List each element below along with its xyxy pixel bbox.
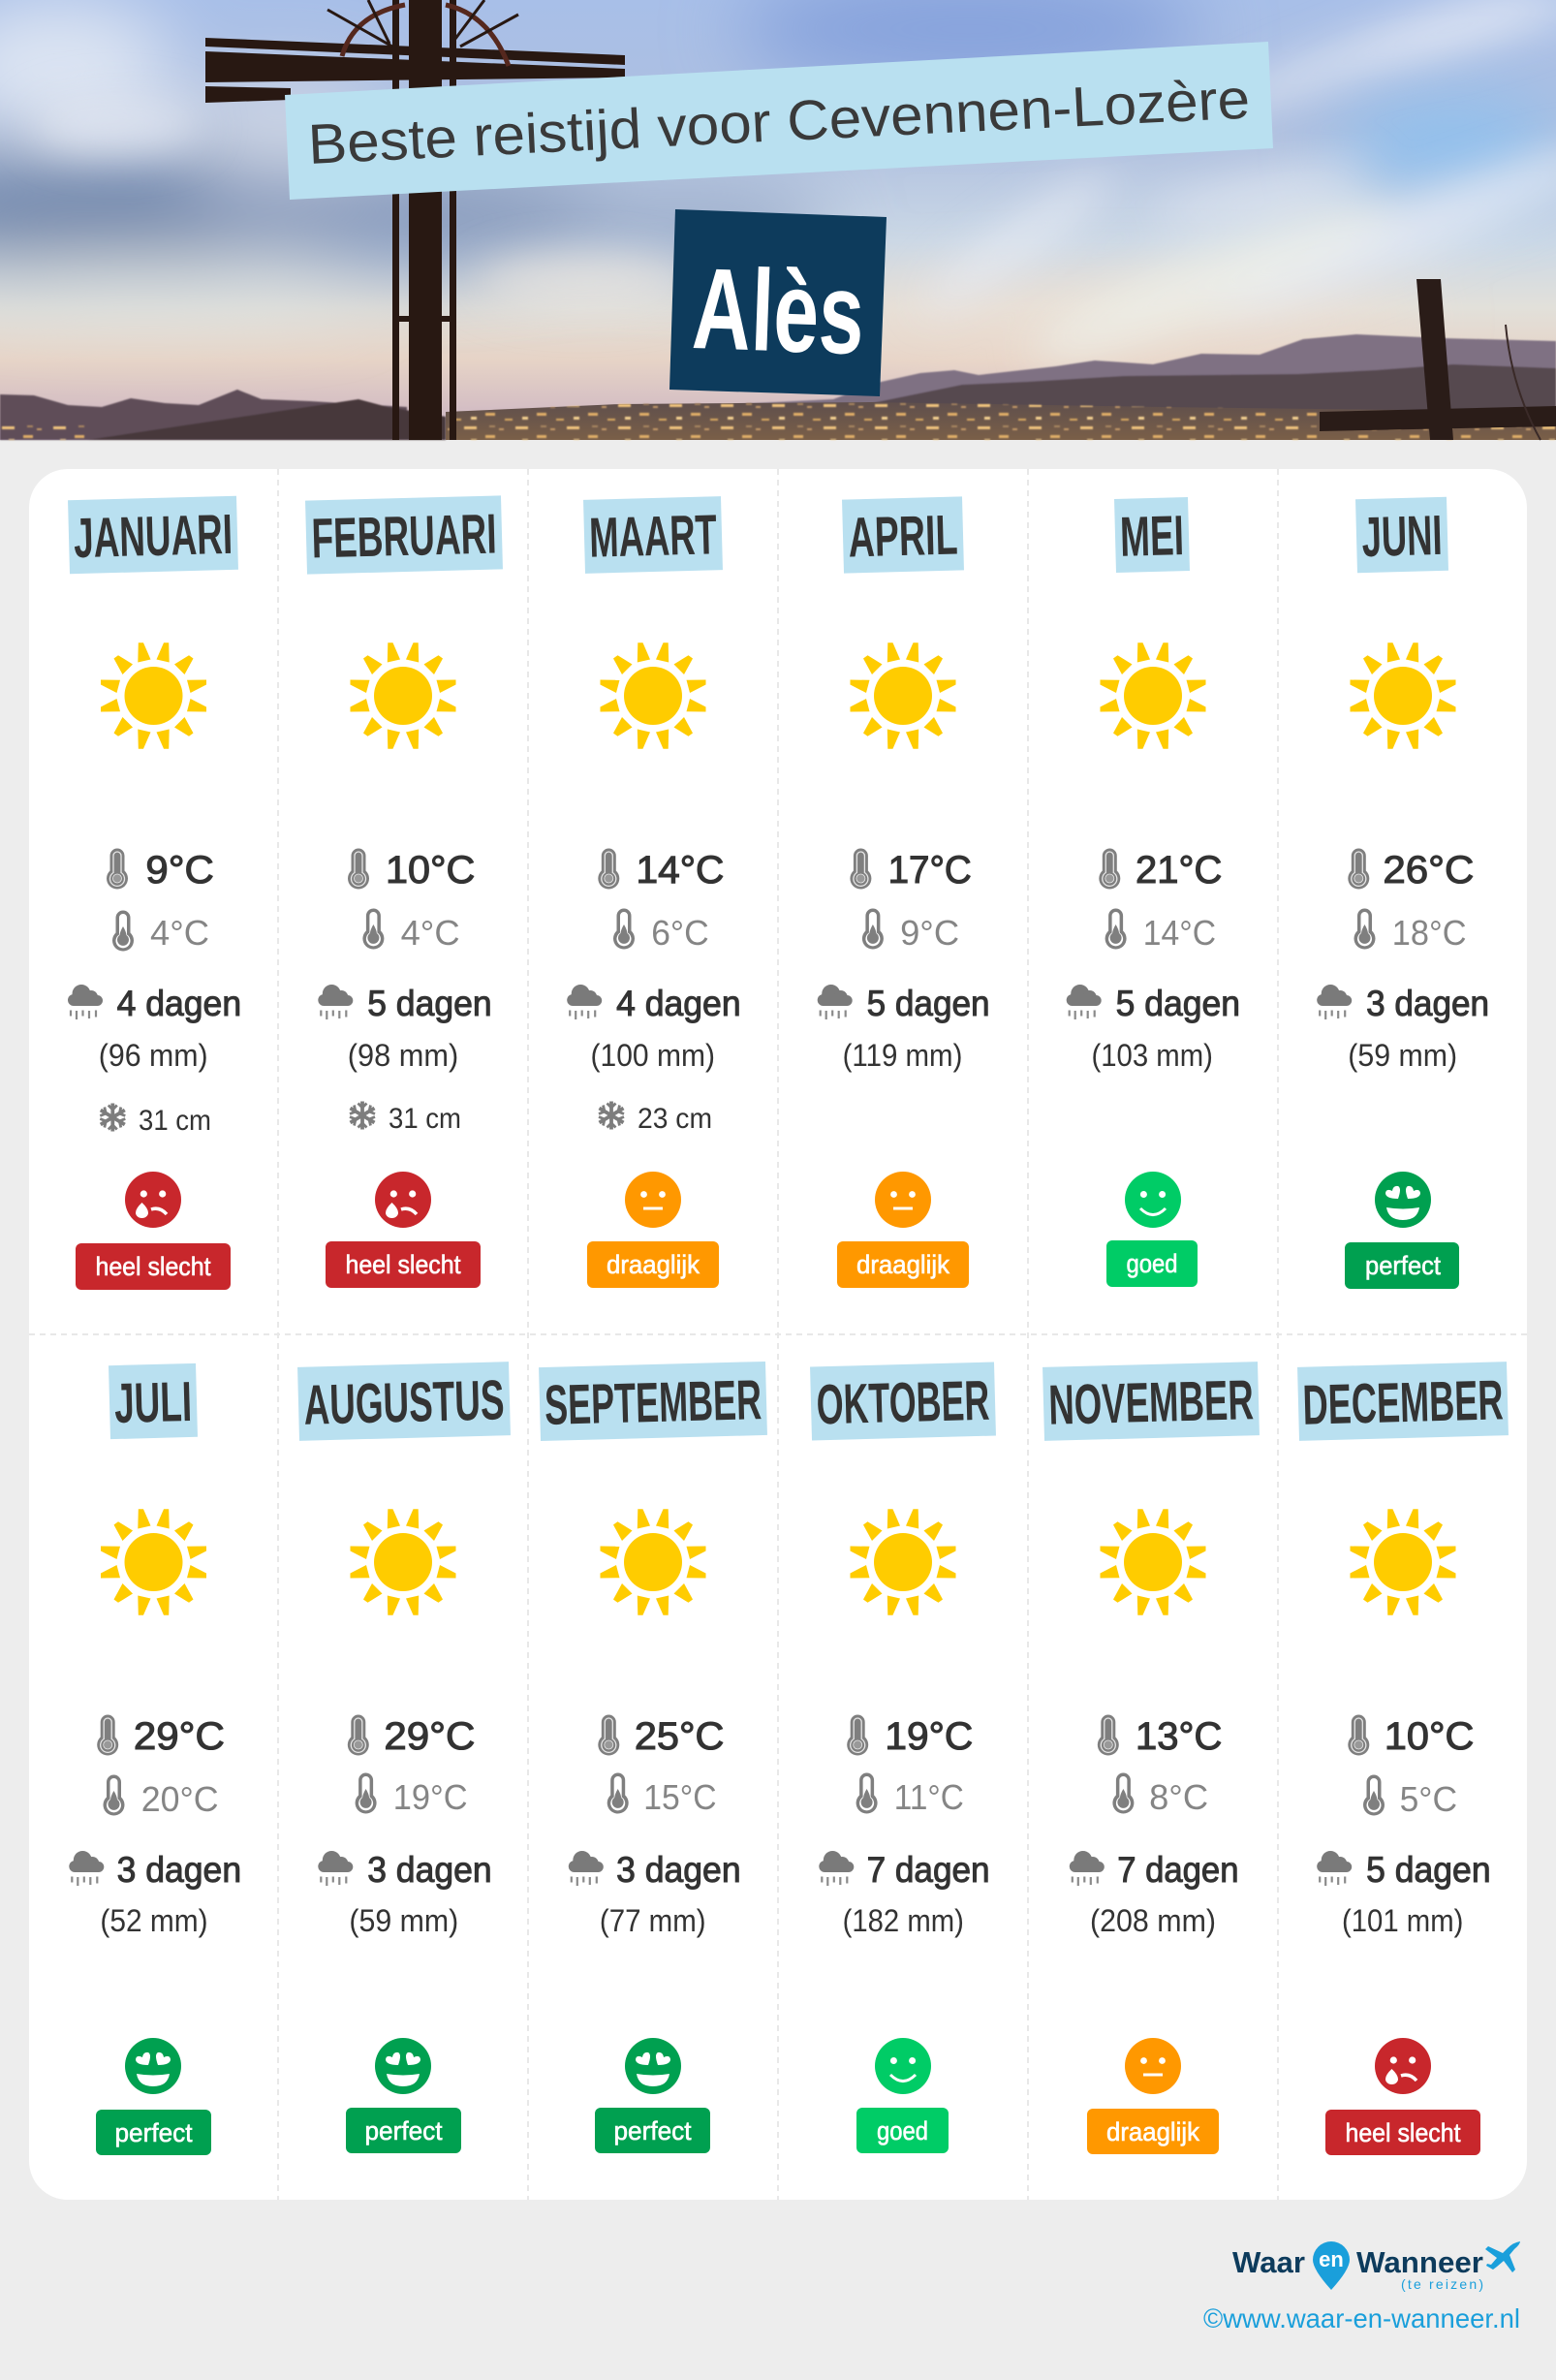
icon: sun — [351, 1509, 455, 1615]
icon: map pin: en — [1319, 2247, 1344, 2271]
high temperature: 14°C — [636, 849, 724, 892]
rainfall: (59 mm) — [349, 1903, 458, 1938]
low temperature: 11°C — [894, 1777, 964, 1817]
rating badge — [1345, 1242, 1459, 1289]
month label: SEPTEMBER — [544, 1368, 762, 1437]
month label — [305, 495, 503, 575]
icon: rating face — [375, 2038, 431, 2094]
panel: juli — [69, 1363, 241, 2155]
icon: sun — [601, 1509, 705, 1615]
header photo — [0, 0, 1556, 440]
icon: thermometer high — [1099, 849, 1120, 890]
rating badge — [326, 1241, 481, 1288]
low temperature: 19°C — [393, 1777, 468, 1817]
icon: thermometer low — [103, 1775, 124, 1816]
logo: Wanneer — [1356, 2245, 1483, 2279]
icon: rating face — [1125, 1172, 1181, 1228]
rating badge: perfect — [364, 2116, 443, 2145]
logo: Waar — [1232, 2245, 1305, 2279]
month label: JANUARI — [73, 503, 233, 570]
icon: sun — [101, 1509, 206, 1615]
rain days: 7 dagen — [1117, 1850, 1238, 1890]
icon: rating face — [875, 1172, 931, 1228]
icon: snow — [599, 1101, 624, 1130]
rain days: 4 dagen — [117, 984, 241, 1023]
icon: rain — [318, 985, 353, 1019]
panel: januari — [68, 496, 241, 1290]
icon: rain — [819, 1851, 854, 1886]
icon: thermometer low — [356, 1773, 377, 1814]
rain days: 7 dagen — [867, 1850, 990, 1890]
panel: juni — [1317, 497, 1489, 1289]
rainfall: (208 mm) — [1090, 1903, 1216, 1938]
low temperature: 9°C — [900, 913, 959, 953]
icon: thermometer low — [1105, 909, 1127, 950]
icon: thermometer high — [1098, 1715, 1119, 1756]
icon: thermometer high — [97, 1715, 118, 1756]
rating badge — [96, 2110, 211, 2155]
rain days: 5 dagen — [1366, 1850, 1491, 1890]
title text: Beste reistijd voor Cevennen-Lozère — [306, 68, 1251, 176]
rainfall: (59 mm) — [1348, 1038, 1457, 1073]
panel: november — [1043, 1362, 1260, 2154]
month label — [1043, 1362, 1260, 1441]
icon: sun — [1101, 642, 1205, 749]
rating badge — [856, 2108, 949, 2153]
rain days: 3 dagen — [1366, 984, 1489, 1023]
rating badge: heel slecht — [1345, 2118, 1461, 2147]
panel: augustus — [297, 1362, 511, 2153]
month label — [810, 1362, 996, 1440]
rain days: 5 dagen — [867, 984, 990, 1023]
city lights — [0, 402, 1556, 440]
snowfall: 31 cm — [389, 1103, 461, 1135]
icon: sun — [1101, 1509, 1205, 1615]
rating badge: draaglijk — [607, 1250, 700, 1279]
rating badge — [587, 1241, 719, 1288]
icon: thermometer high — [1348, 1715, 1369, 1756]
high temperature: 17°C — [888, 849, 972, 892]
icon: thermometer low — [862, 909, 884, 950]
rating badge: draaglijk — [856, 1250, 949, 1279]
rating badge: heel slecht — [345, 1250, 461, 1279]
icon: thermometer high — [598, 1715, 619, 1756]
icon: thermometer high — [847, 1715, 868, 1756]
month label — [1114, 497, 1190, 573]
icon: rain — [818, 985, 853, 1019]
icon: rain — [567, 985, 602, 1019]
month label — [539, 1362, 767, 1441]
month label — [1355, 497, 1448, 573]
low temperature: 15°C — [643, 1777, 717, 1817]
rain days: 3 dagen — [367, 1850, 492, 1890]
city label — [669, 209, 887, 396]
low temperature: 4°C — [401, 913, 460, 953]
rainfall: (52 mm) — [100, 1903, 208, 1938]
icon: map pin — [1313, 2241, 1350, 2290]
high temperature: 29°C — [134, 1715, 225, 1758]
icon: thermometer low — [1354, 909, 1376, 950]
right cross — [1320, 279, 1556, 440]
rating badge: perfect — [1365, 1251, 1441, 1280]
logo: (te reizen) — [1401, 2276, 1483, 2292]
panel: maart — [567, 496, 741, 1288]
rating badge: draaglijk — [1106, 2117, 1199, 2146]
month label: OKTOBER — [816, 1369, 990, 1436]
rating badge — [837, 1241, 969, 1288]
panel: april — [818, 496, 990, 1288]
high temperature: 26°C — [1383, 849, 1474, 892]
month label: JUNI — [1361, 504, 1443, 569]
month label — [68, 496, 238, 574]
month label: AUGUSTUS — [303, 1368, 505, 1437]
rating badge: goed — [1126, 1249, 1178, 1278]
icon: thermometer high — [107, 849, 128, 890]
city name: Alès — [691, 244, 866, 379]
icon: snow — [350, 1101, 375, 1130]
icon: rain — [1317, 1851, 1352, 1886]
rainfall: (119 mm) — [843, 1038, 962, 1073]
icon: sun — [101, 642, 206, 749]
month label: APRIL — [848, 504, 958, 569]
icon: thermometer low — [607, 1773, 629, 1814]
rainfall: (101 mm) — [1342, 1903, 1463, 1938]
icon: rating face — [125, 1172, 181, 1228]
month label — [583, 496, 723, 574]
icon: thermometer high — [1348, 849, 1369, 890]
left cross — [205, 0, 625, 440]
snowfall: 23 cm — [638, 1103, 712, 1135]
icon: rating face — [875, 2038, 931, 2094]
icon: thermometer high — [348, 849, 369, 890]
icon: rain — [68, 985, 103, 1019]
icon: rating face — [1375, 2038, 1431, 2094]
rating badge — [1325, 2110, 1480, 2155]
icon: thermometer low — [112, 911, 134, 952]
rating badge — [595, 2108, 710, 2153]
rainfall: (77 mm) — [600, 1903, 706, 1938]
icon: rain — [1067, 985, 1102, 1019]
icon: snow — [100, 1103, 125, 1132]
rainfall: (103 mm) — [1091, 1038, 1213, 1073]
low temperature: 5°C — [1400, 1779, 1457, 1819]
icon: rating face — [125, 2038, 181, 2094]
icon: rain — [1070, 1851, 1105, 1886]
low temperature: 18°C — [1392, 913, 1467, 953]
month label — [297, 1362, 511, 1441]
logo — [1232, 2241, 1520, 2292]
rainfall: (96 mm) — [99, 1038, 208, 1073]
high temperature: 10°C — [1385, 1715, 1474, 1758]
icon: thermometer low — [362, 909, 384, 950]
icon: thermometer high — [598, 849, 619, 890]
rain days: 5 dagen — [367, 984, 492, 1023]
high temperature: 13°C — [1136, 1715, 1222, 1758]
rating badge: perfect — [114, 2118, 193, 2147]
icon: rating face — [1125, 2038, 1181, 2094]
icon: sun — [1351, 1509, 1455, 1615]
panel: september — [539, 1362, 767, 2153]
rating badge: heel slecht — [95, 1252, 211, 1281]
high temperature: 21°C — [1136, 849, 1222, 892]
website credit: ©www.waar-en-wanneer.nl — [1203, 2303, 1520, 2333]
month label: NOVEMBER — [1047, 1368, 1255, 1437]
high temperature: 29°C — [384, 1715, 475, 1758]
rating badge — [1106, 1240, 1198, 1287]
icon: thermometer low — [613, 909, 635, 950]
icon: thermometer low — [856, 1773, 878, 1814]
icon: thermometer low — [1112, 1773, 1134, 1814]
icon: rating face — [1375, 1172, 1431, 1228]
low temperature: 14°C — [1143, 913, 1216, 953]
icon: sun — [851, 642, 955, 749]
snowfall: 31 cm — [139, 1105, 211, 1137]
icon: rain — [318, 1851, 353, 1886]
rainfall: (100 mm) — [591, 1038, 715, 1073]
icon: thermometer low — [1363, 1775, 1385, 1816]
rain days: 3 dagen — [616, 1850, 741, 1890]
panel: oktober — [810, 1362, 996, 2153]
low temperature: 8°C — [1149, 1777, 1208, 1817]
month label: MAART — [588, 503, 718, 570]
mountains — [0, 334, 1556, 440]
low temperature: 4°C — [150, 913, 209, 953]
icon: sun — [601, 642, 705, 749]
high temperature: 25°C — [635, 1715, 724, 1758]
month label: JULI — [113, 1370, 193, 1435]
rain days: 3 dagen — [117, 1850, 241, 1890]
icon: plane — [1485, 2241, 1520, 2272]
icon: rating face — [375, 1172, 431, 1228]
high temperature: 10°C — [386, 849, 475, 892]
rating badge: goed — [877, 2116, 928, 2145]
icon: sun — [851, 1509, 955, 1615]
title banner — [285, 42, 1273, 200]
icon: thermometer high — [850, 849, 871, 890]
rating badge — [76, 1243, 231, 1290]
month label: MEI — [1119, 504, 1185, 569]
low temperature: 6°C — [651, 913, 709, 953]
icon: rain — [69, 1851, 104, 1886]
month label: FEBRUARI — [311, 503, 497, 570]
icon: rating face — [625, 2038, 681, 2094]
icon: sun — [1351, 642, 1455, 749]
high temperature: 19°C — [885, 1715, 973, 1758]
rainfall: (182 mm) — [843, 1903, 964, 1938]
panel: december — [1297, 1362, 1509, 2155]
rainfall: (98 mm) — [348, 1038, 458, 1073]
panel: mei — [1067, 497, 1240, 1287]
icon: sun — [351, 642, 455, 749]
icon: rain — [569, 1851, 604, 1886]
high temperature: 9°C — [145, 849, 214, 892]
month label — [109, 1363, 198, 1439]
panel: februari — [305, 495, 503, 1288]
icon: thermometer high — [348, 1715, 369, 1756]
month label — [842, 496, 964, 574]
rating badge: perfect — [614, 2116, 692, 2145]
rating badge — [346, 2108, 461, 2153]
icon: rating face — [625, 1172, 681, 1228]
icon: rain — [1317, 985, 1352, 1019]
rain days: 4 dagen — [616, 984, 741, 1023]
low temperature: 20°C — [141, 1779, 219, 1819]
rain days: 5 dagen — [1116, 984, 1240, 1023]
panel: climate table — [29, 469, 1527, 2200]
rating badge — [1087, 2109, 1219, 2154]
